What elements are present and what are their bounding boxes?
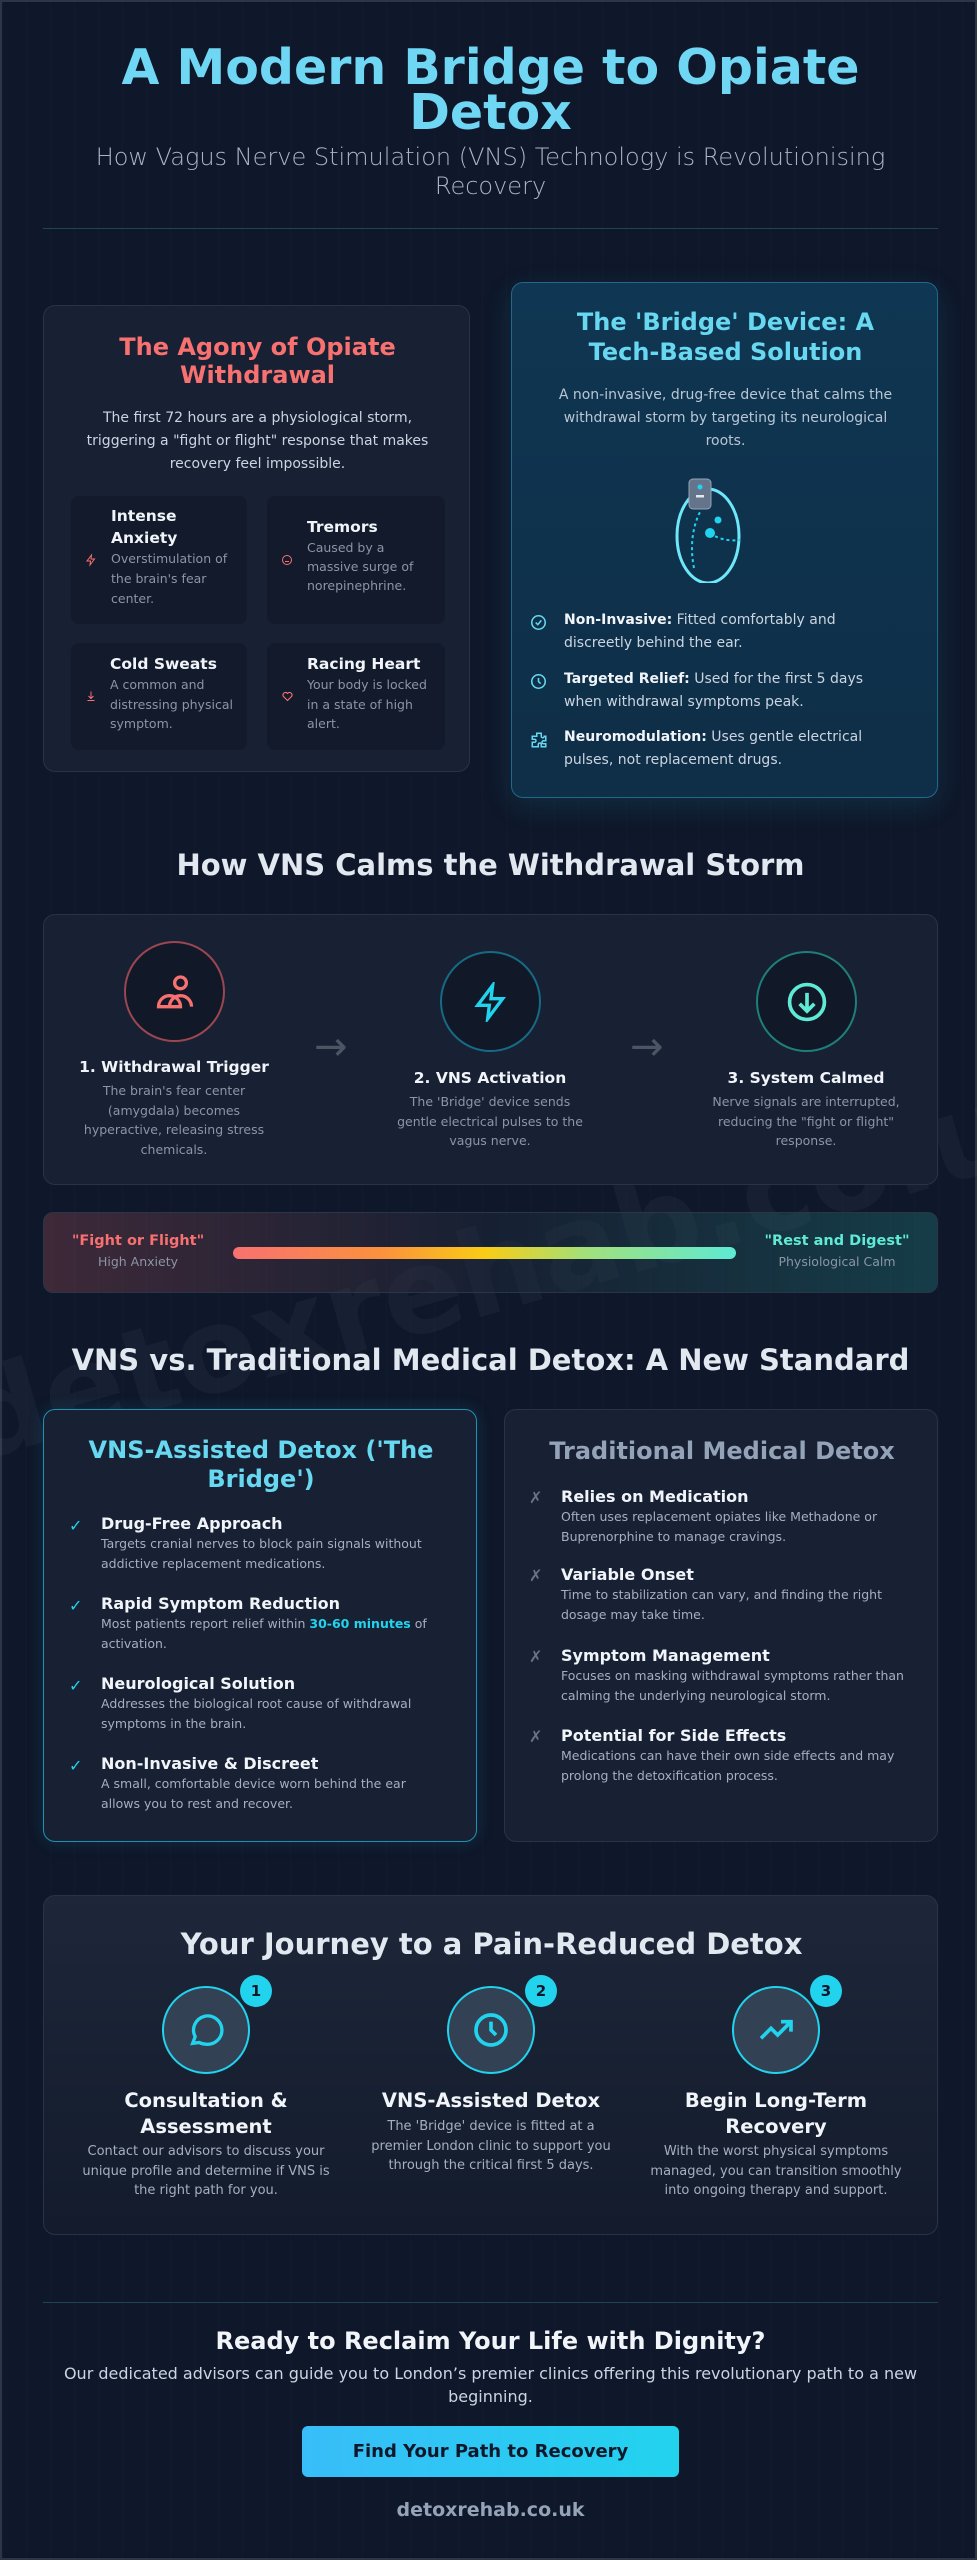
item: side effects: Potential for Side Effects [561,1726,786,1745]
heading: agony: Withdrawal [180,361,335,389]
item: variable onset: ✗ [529,1566,542,1585]
text: device intro: A non-invasive, drug-free device that calms the withdrawal storm by targeting its neurological roots. [559,387,892,449]
feature: neuromodulation: Neuromodulation: Uses gentle electrical pulses, not replacement drugs. [564,729,862,768]
item: non-invasive: A small, comfortable device worn behind the ear allows you to rest and recover. [101,1776,406,1811]
item: rapid reduction: Most patients report relief within 30-60 minutes of activation. [101,1616,427,1651]
heading: VNS-assisted: Bridge') [207,1465,315,1493]
icon: heart [282,692,293,702]
item: rapid reduction: ✓ [69,1596,82,1615]
journey step 3: With the worst physical symptoms managed, you can transition smoothly into ongoing therapy and support. [650,2144,902,2198]
symptom: cold sweats [71,643,247,750]
journey step 1: Assessment [140,2115,272,2138]
step 3: system calmed: Nerve signals are interrupted, reducing the "fight or flight" response. [712,1094,900,1148]
subtitle [96,143,885,200]
step 1: withdrawal trigger: 1. Withdrawal Trigger [79,1058,269,1076]
text: agony intro: The first 72 hours are a physiological storm, triggering a "fight or flight" response that makes recovery feel impossible. [87,410,428,472]
item: drug-free: ✓ [69,1516,82,1535]
symptom: cold sweats: A common and distressing physical symptom. [110,677,233,731]
heading: how VNS calms: How VNS Calms the Withdrawal Storm [176,848,805,882]
icon: ear device [676,478,740,583]
symptom: tremors [267,496,445,624]
panel: VNS process steps [43,914,938,1185]
CTA button [302,2426,679,2477]
journey step 1: 1 [251,1982,261,2000]
step 3: system calmed: 3. System Calmed [728,1069,884,1087]
heading: VNS vs traditional: VNS vs. Traditional Medical Detox: A New Standard [72,1343,909,1377]
item: non-invasive: Non-Invasive & Discreet [101,1754,318,1773]
panel: agony of withdrawal [43,305,470,772]
symptom: intense anxiety [71,496,247,624]
CTA text: Our dedicated advisors can guide you to London’s premier clinics offering this revolutionary path to a new beginning. [64,2364,917,2406]
journey step 1 [82,1975,330,2198]
label: rest and digest: Physiological Calm [778,1254,896,1269]
item: symptom management: ✗ [529,1647,542,1666]
heading: journey: Your Journey to a Pain-Reduced Detox [181,1927,802,1961]
footer: detoxrehab.co.uk [396,2499,584,2521]
bar: gradient scale [233,1247,736,1259]
label: rest and digest [764,1233,910,1269]
feature: non-invasive: Non-Invasive: Fitted comfortably and discreetly behind the ear. [564,612,836,651]
item: side effects [529,1726,894,1783]
arrow: → [630,1024,664,1070]
symptom: racing heart: Racing Heart [307,655,420,673]
step 1: withdrawal trigger: The brain's fear center (amygdala) becomes hyperactive, releasing stress chemicals. [84,1083,264,1156]
journey step 3: 3 [821,1982,831,2000]
feature: targeted relief: Targeted Relief: Used for the first 5 days when withdrawal symptoms peak. [564,671,863,710]
subtitle: How Vagus Nerve Stimulation (VNS) Technology is Revolutionising [96,143,885,171]
panel: journey [43,1895,938,2235]
icon: face [282,555,292,565]
heading: bridge device [577,308,874,366]
item: symptom management: Focuses on masking withdrawal symptoms rather than calming the underlying neurological storm. [561,1668,904,1703]
symptom: racing heart [267,643,445,750]
journey step 2: The 'Bridge' device is fitted at a premier London clinic to support you through the critical first 5 days. [371,2119,611,2173]
icon: lightning [86,553,96,567]
item: medication [529,1487,878,1544]
panel: traditional detox [504,1409,938,1842]
heading: agony: The Agony of Opiate [119,333,396,361]
item: neurological: ✓ [69,1676,82,1695]
item: drug-free: Drug-Free Approach [101,1514,283,1533]
symptom: cold sweats: Cold Sweats [110,655,217,673]
item: medication: ✗ [529,1488,542,1507]
journey step 2 [371,1975,611,2173]
item: drug-free: Targets cranial nerves to block pain signals without addictive replacement medications. [101,1536,422,1571]
item: medication: Often uses replacement opiates like Methadone or Buprenorphine to manage cravings. [561,1509,877,1544]
journey step 3: Recovery [725,2115,827,2138]
journey step 2: VNS-Assisted Detox [382,2089,600,2112]
label: fight or flight: "Fight or Flight" [72,1233,204,1249]
item: rapid reduction: Rapid Symptom Reduction [101,1594,340,1613]
feature list: device benefits [531,612,863,768]
item: neurological: Addresses the biological root cause of withdrawal symptoms in the brain. [101,1696,411,1731]
item: variable onset: Variable Onset [561,1565,694,1584]
CTA heading: Ready to Reclaim Your Life with Dignity? [216,2327,765,2355]
title: A Modern Bridge to Opiate [122,39,859,96]
symptom: tremors: Caused by a massive surge of norepinephrine. [307,540,413,593]
step 3: system calmed [712,951,900,1148]
step 2: VNS activation: The 'Bridge' device sends gentle electrical pulses to the vagus nerve. [397,1094,583,1148]
step 2: VNS activation [397,951,583,1148]
icon: drop [88,692,94,701]
item: variable onset [529,1565,882,1622]
label: fight or flight [72,1233,204,1269]
symptom: intense anxiety: Intense [111,507,176,525]
heading: bridge device: The 'Bridge' Device: A [577,308,874,336]
item: medication: Relies on Medication [561,1487,749,1506]
journey step 2: 2 [536,1982,546,2000]
item: variable onset: Time to stabilization can vary, and finding the right dosage may take time. [561,1587,882,1622]
step 2: VNS activation: 2. VNS Activation [414,1069,566,1087]
item: side effects: Medications can have their own side effects and may prolong the detoxification process. [561,1748,894,1783]
journey step 1: Consultation & [124,2089,288,2112]
item: non-invasive: ✓ [69,1756,82,1775]
symptom: intense anxiety: Overstimulation of the brain's fear center. [111,551,227,606]
item: side effects: ✗ [529,1727,542,1746]
label: rest and digest: "Rest and Digest" [764,1233,910,1249]
panel: fight-or-flight to rest gradient [43,1212,938,1293]
item: drug-free [69,1514,422,1571]
item: symptom management: Symptom Management [561,1646,770,1665]
heading: agony [119,333,396,389]
item: symptom management [529,1646,904,1703]
item: rapid reduction [69,1594,427,1651]
subtitle: Recovery [435,172,546,200]
journey step 1: Contact our advisors to discuss your unique profile and determine if VNS is the right path for you. [82,2144,330,2198]
title: Detox [409,84,572,141]
heading: VNS-assisted: VNS-Assisted Detox ('The [89,1436,433,1464]
item: non-invasive [69,1754,406,1811]
step 1: withdrawal trigger [79,941,269,1156]
arrow: → [314,1024,348,1070]
symptom: intense anxiety: Anxiety [111,529,177,547]
heading: bridge device: Tech-Based Solution [589,338,862,366]
journey step 3 [650,1975,902,2198]
panel: VNS-assisted detox [43,1409,477,1842]
title [122,39,859,141]
symptom: racing heart: Your body is locked in a state of high alert. [307,677,427,731]
journey step 3: Begin Long-Term [685,2089,867,2112]
item: neurological [69,1674,411,1731]
panel: bridge device [511,282,938,798]
symptom: tremors: Tremors [307,518,378,536]
label: fight or flight: High Anxiety [98,1254,178,1269]
heading: VNS-assisted [88,1436,433,1493]
item: neurological: Neurological Solution [101,1674,295,1693]
heading: traditional: Traditional Medical Detox [549,1437,895,1465]
CTA button: Find Your Path to Recovery [353,2441,628,2462]
